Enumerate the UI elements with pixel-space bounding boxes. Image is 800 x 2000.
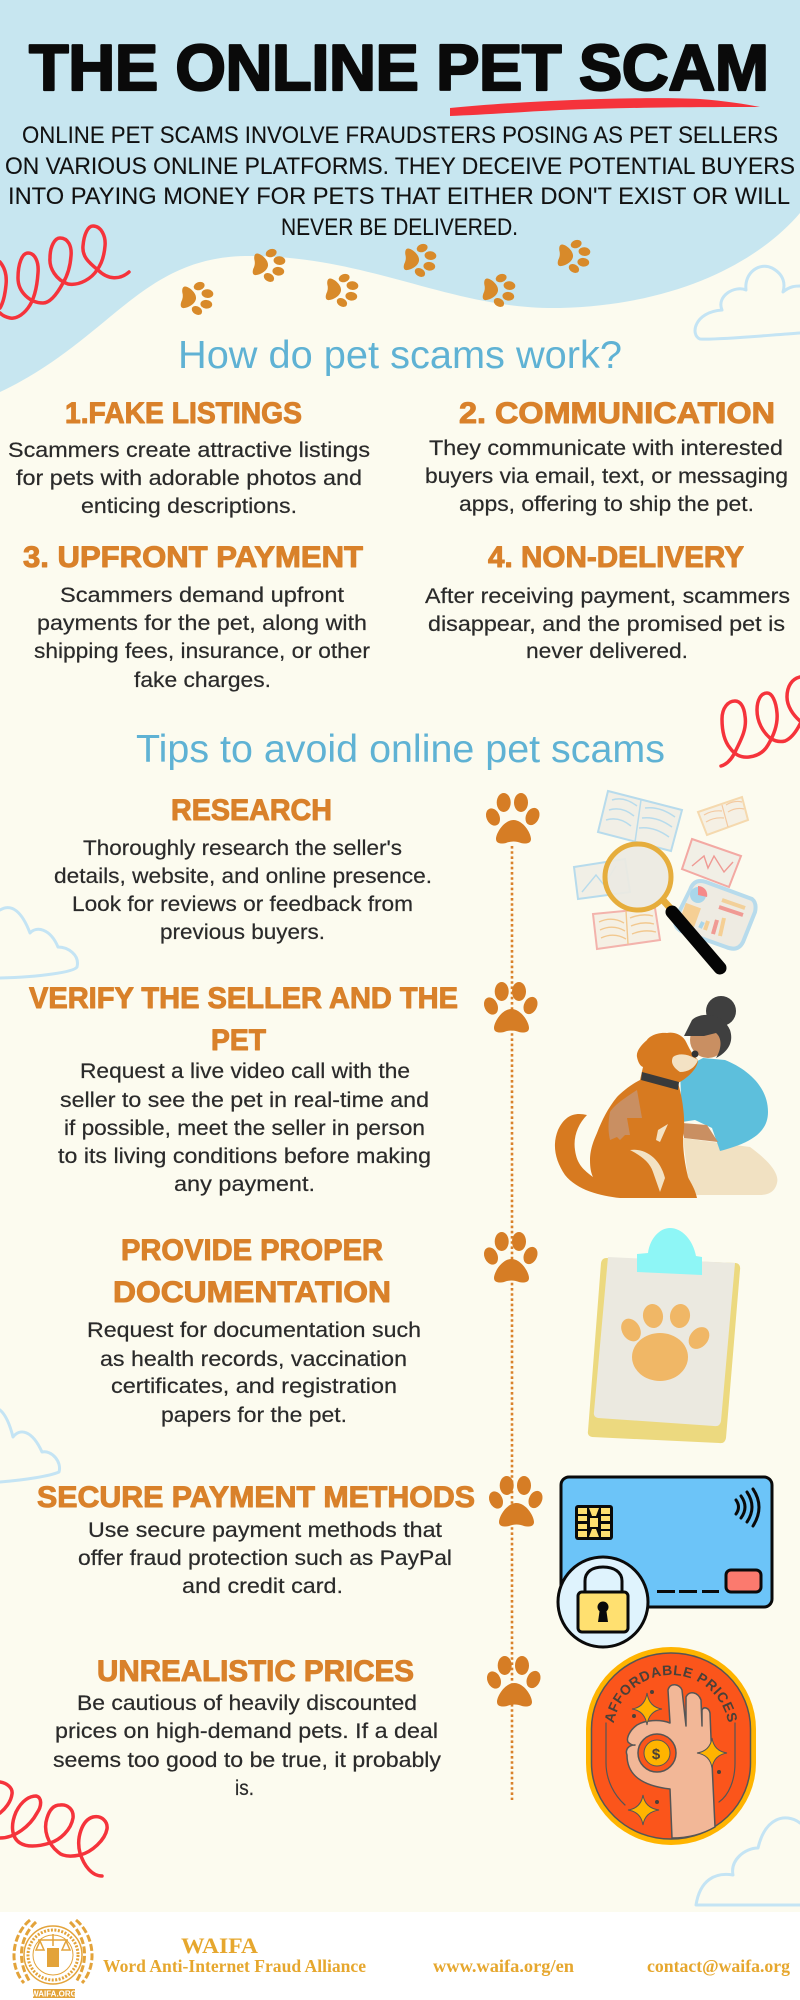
icon: timeline paw 3 xyxy=(481,1232,540,1283)
paper paw xyxy=(617,1302,714,1381)
footer organisation name: Word Anti-Internet Fraud Alliance xyxy=(103,1956,366,1976)
panel: tip documentation xyxy=(87,1234,421,1427)
card xyxy=(561,1477,772,1607)
orange book bottom xyxy=(593,908,660,949)
head xyxy=(690,1022,726,1058)
heading: tips to avoid online pet scams: Tips to avoid online pet scams xyxy=(136,728,665,771)
heading: unrealistic prices: UNREALISTIC PRICES xyxy=(97,1655,414,1688)
text: step 2: apps, offering to ship the pet. xyxy=(459,493,754,516)
text: step 3: shipping fees, insurance, or other xyxy=(34,640,370,663)
panel: step 4 non-delivery xyxy=(425,541,790,663)
panel: step 1 fake listings xyxy=(8,397,370,518)
hair xyxy=(684,1015,731,1058)
heading: step 4: 4. NON-DELIVERY xyxy=(488,541,744,574)
text: documentation: as health records, vaccination xyxy=(100,1348,407,1371)
text: verify: to its living conditions before making xyxy=(58,1145,431,1168)
hair bun xyxy=(706,996,736,1026)
footer website: www.waifa.org/en xyxy=(433,1956,574,1976)
intro paragraph: NEVER BE DELIVERED. xyxy=(281,214,518,241)
illustration: credit card with lock xyxy=(558,1477,772,1647)
text: step 4: disappear, and the promised pet is xyxy=(428,613,785,636)
cloud bottom right xyxy=(696,1818,800,1905)
hand on dog xyxy=(608,1090,642,1140)
pink chart xyxy=(682,839,741,887)
footer logo xyxy=(14,1920,92,1998)
logo caption: WAIFA.ORG xyxy=(31,1990,77,1998)
illustration: affordable prices badge xyxy=(586,1647,756,1845)
heading: research: RESEARCH xyxy=(171,794,332,827)
hand xyxy=(626,1685,715,1838)
paper xyxy=(594,1257,735,1426)
badge inner xyxy=(592,1653,750,1839)
dog collar xyxy=(641,1072,679,1090)
intro paragraph: INTO PAYING MONEY FOR PETS THAT EITHER DON'T EXIST OR WILL xyxy=(8,183,790,210)
cloud left upper xyxy=(0,908,77,978)
cloud top right xyxy=(695,266,800,339)
cloud left lower xyxy=(0,1410,60,1482)
text: step 1: Scammers create attractive listings xyxy=(8,439,370,462)
footer organisation name xyxy=(103,1933,366,1976)
badge arc text: AFFORDABLE PRICES xyxy=(605,1665,737,1724)
board xyxy=(588,1258,740,1443)
illustration: woman with dog xyxy=(555,996,777,1198)
text: research: previous buyers. xyxy=(160,921,325,944)
text: step 4: After receiving payment, scammers xyxy=(425,585,790,608)
sparkles xyxy=(628,1693,727,1825)
text: documentation: Request for documentation such xyxy=(87,1319,421,1342)
text: unrealistic prices xyxy=(53,1692,442,1800)
dashboard tablet xyxy=(675,881,756,949)
red squiggle bottom left xyxy=(0,1782,107,1876)
text: step 2: buyers via email, text, or messaging xyxy=(425,465,788,488)
text: unrealistic prices: Be cautious of heavily discounted xyxy=(77,1692,417,1715)
dog body xyxy=(555,1033,698,1198)
text: research: details, website, and online presence. xyxy=(54,865,432,888)
text: documentation: certificates, and registration xyxy=(111,1375,397,1398)
panel: tip verify the seller xyxy=(29,982,458,1196)
header blue wave xyxy=(0,0,800,392)
title underline brush xyxy=(450,98,760,116)
text: secure payment xyxy=(78,1519,452,1598)
shirt xyxy=(680,1058,768,1151)
footer email: contact@waifa.org xyxy=(647,1956,790,1976)
timeline dotted line xyxy=(511,846,513,1800)
heading: step 1: 1.FAKE LISTINGS xyxy=(65,397,302,430)
heading: verify xyxy=(29,982,458,1057)
dog muzzle xyxy=(672,1054,698,1072)
blue chart xyxy=(574,859,630,899)
heading: secure payment: SECURE PAYMENT METHODS xyxy=(37,1481,475,1514)
text: step 3 xyxy=(34,584,370,692)
blue book xyxy=(598,791,682,851)
text: unrealistic prices: is. xyxy=(235,1777,254,1800)
icon: timeline paw 4 xyxy=(486,1476,545,1527)
text: verify: any payment. xyxy=(174,1173,315,1196)
text: unrealistic prices: seems too good to be true, it probably xyxy=(53,1749,442,1772)
laurel wreath xyxy=(14,1920,92,1983)
magnifier handle xyxy=(662,899,720,968)
heading: verify: VERIFY THE SELLER AND THE xyxy=(29,982,458,1015)
chip xyxy=(575,1505,613,1540)
text: verify: Request a live video call with the xyxy=(80,1060,410,1083)
text: secure payment: Use secure payment methods that xyxy=(88,1519,442,1542)
badge outer xyxy=(586,1647,756,1845)
icon: timeline paw 5 xyxy=(484,1656,543,1707)
heading: documentation: PROVIDE PROPER xyxy=(121,1234,383,1267)
text: step 3: fake charges. xyxy=(134,669,271,692)
heading: documentation: DOCUMENTATION xyxy=(113,1276,391,1309)
text: step 4 xyxy=(425,585,790,663)
coin: $ xyxy=(652,1746,661,1763)
magnifier lens xyxy=(605,844,671,910)
dog chest marking xyxy=(630,1124,668,1192)
contactless icon xyxy=(736,1489,759,1526)
panel: tip unrealistic prices xyxy=(53,1655,442,1800)
text: step 1: for pets with adorable photos and xyxy=(16,467,362,490)
text: research xyxy=(54,837,432,944)
title: THE ONLINE PET SCAM xyxy=(29,31,769,104)
text: research: Thoroughly research the seller's xyxy=(83,837,402,860)
dog nose xyxy=(692,1050,698,1058)
text: step 4: never delivered. xyxy=(526,640,688,663)
text: documentation xyxy=(87,1319,421,1427)
text: secure payment: offer fraud protection such as PayPal xyxy=(78,1547,452,1570)
text: step 3: Scammers demand upfront xyxy=(60,584,344,607)
signature panel xyxy=(726,1570,761,1592)
heading: verify: PET xyxy=(211,1024,266,1057)
text: step 1 xyxy=(8,439,370,518)
text: unrealistic prices: prices on high-demand pets. If a deal xyxy=(55,1720,438,1743)
decorative paw prints xyxy=(180,236,592,318)
clip xyxy=(637,1228,702,1275)
illustration: clipboard with paw xyxy=(588,1228,740,1443)
lock badge xyxy=(558,1557,648,1647)
orange book small xyxy=(698,797,748,835)
intro paragraph xyxy=(5,122,795,241)
coin xyxy=(638,1734,676,1772)
text: step 2 xyxy=(425,437,788,516)
panel: tip research xyxy=(54,794,432,944)
side curves xyxy=(606,1723,735,1805)
footer organisation name: WAIFA xyxy=(181,1933,258,1958)
text: secure payment: and credit card. xyxy=(182,1575,343,1598)
heading: step 3: 3. UPFRONT PAYMENT xyxy=(23,541,363,574)
text: verify: if possible, meet the seller in person xyxy=(64,1117,425,1140)
panel: step 3 upfront payment xyxy=(23,541,370,692)
trousers xyxy=(683,1138,777,1195)
text: verify: seller to see the pet in real-time and xyxy=(60,1089,429,1112)
panel: step 2 communication xyxy=(425,397,788,516)
forearm xyxy=(682,1123,718,1142)
red squiggle top left xyxy=(0,226,129,318)
scales emblem xyxy=(36,1934,70,1950)
icon: timeline paw 2 xyxy=(481,982,540,1033)
footer band xyxy=(0,1912,800,2000)
heading: step 2: 2. COMMUNICATION xyxy=(459,397,775,430)
text: documentation: papers for the pet. xyxy=(161,1404,347,1427)
icon: timeline paw 1 xyxy=(483,793,542,844)
dots xyxy=(632,1690,721,1804)
panel: tip secure payment xyxy=(37,1481,475,1598)
red squiggle right xyxy=(721,677,800,766)
heading: documentation xyxy=(113,1234,391,1309)
text: verify xyxy=(58,1060,431,1196)
heading: how do pet scams work: How do pet scams work? xyxy=(178,334,622,377)
text: research: Look for reviews or feedback from xyxy=(72,893,413,916)
card dashes xyxy=(657,1590,719,1593)
text: step 2: They communicate with interested xyxy=(429,437,783,460)
illustration: research documents and magnifier xyxy=(574,791,756,968)
seal ring xyxy=(24,1926,82,1984)
text: step 1: enticing descriptions. xyxy=(81,495,297,518)
text: step 3: payments for the pet, along with xyxy=(37,612,367,635)
